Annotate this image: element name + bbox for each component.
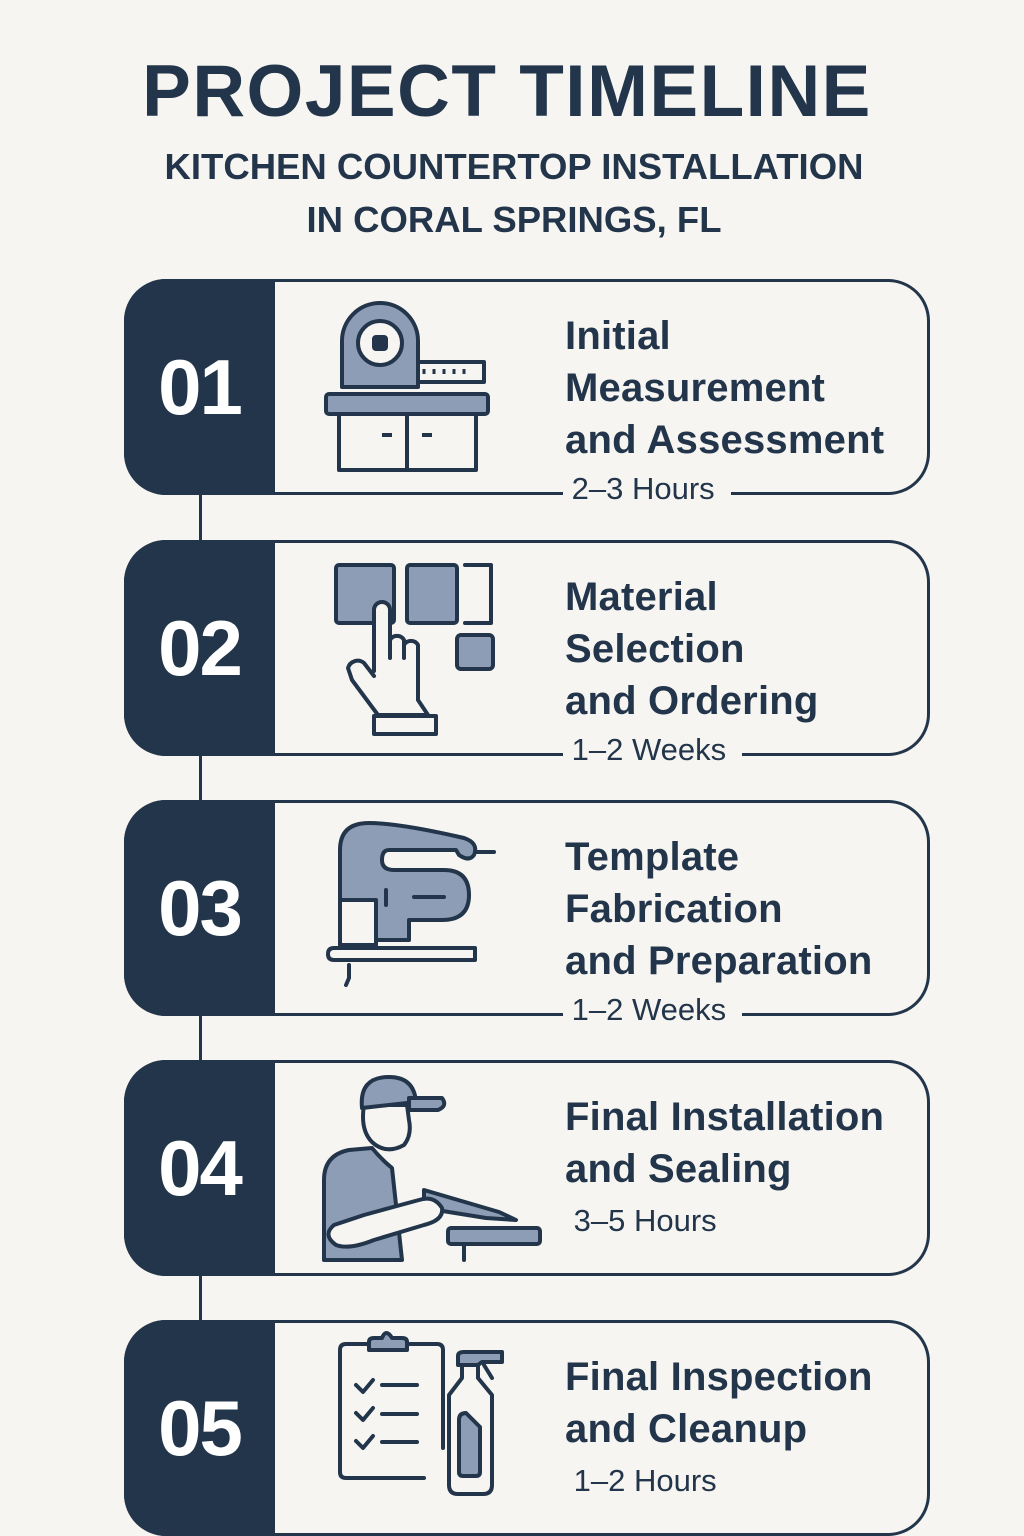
step number 04: 04 <box>158 1124 241 1212</box>
connector 1-2 <box>199 495 202 541</box>
step number 03: 03 <box>158 864 241 952</box>
panel: step 04 <box>124 1060 930 1276</box>
icon: hand selecting material <box>334 563 495 736</box>
step text: Initial <box>565 314 671 358</box>
icon: checklist and spray bottle <box>338 1331 504 1496</box>
step text <box>565 314 884 462</box>
step text: Measurement <box>565 366 825 410</box>
panel: step 03 <box>124 800 930 1016</box>
connector 4-5 <box>199 1275 202 1321</box>
subtitle: IN CORAL SPRINGS, FL <box>306 199 722 240</box>
duration: 1–2 Weeks <box>572 992 726 1027</box>
step number 02: 02 <box>158 604 241 692</box>
duration: 3–5 Hours <box>574 1203 717 1238</box>
title: PROJECT TIMELINE <box>142 51 872 132</box>
duration: 1–2 Weeks <box>572 732 726 767</box>
step text <box>565 1355 873 1451</box>
step text: and Ordering <box>565 679 819 723</box>
step number 05: 05 <box>158 1384 241 1472</box>
icon: jigsaw <box>326 821 496 988</box>
icon: tape measure on cabinet <box>324 301 490 472</box>
subtitle <box>165 146 863 240</box>
step text: Final Inspection <box>565 1355 873 1399</box>
connector 3-4 <box>199 1015 202 1061</box>
panel: step 05 <box>124 1320 930 1536</box>
step number 04 <box>124 1060 275 1276</box>
step number 01: 01 <box>158 343 241 431</box>
panel: step 01 <box>124 279 930 495</box>
step text: and Preparation <box>565 939 873 983</box>
step text: Selection <box>565 627 745 671</box>
icon: worker with caulk gun <box>322 1075 542 1262</box>
step text <box>565 575 819 723</box>
step text: Template <box>565 835 739 879</box>
step text: Final Installation <box>565 1095 884 1139</box>
step number 05 <box>124 1320 275 1536</box>
step number 01 <box>124 279 275 495</box>
step text: and Assessment <box>565 418 884 462</box>
step text <box>565 1095 884 1191</box>
duration: 1–2 Hours <box>574 1463 717 1498</box>
step text: Fabrication <box>565 887 783 931</box>
step text: and Cleanup <box>565 1407 807 1451</box>
panel: step 02 <box>124 540 930 756</box>
connector 2-3 <box>199 755 202 801</box>
step text <box>565 835 873 983</box>
subtitle: KITCHEN COUNTERTOP INSTALLATION <box>165 146 863 187</box>
step text: Material <box>565 575 718 619</box>
duration: 2–3 Hours <box>572 471 715 506</box>
step number 03 <box>124 800 275 1016</box>
step text: and Sealing <box>565 1147 792 1191</box>
step number 02 <box>124 540 275 756</box>
